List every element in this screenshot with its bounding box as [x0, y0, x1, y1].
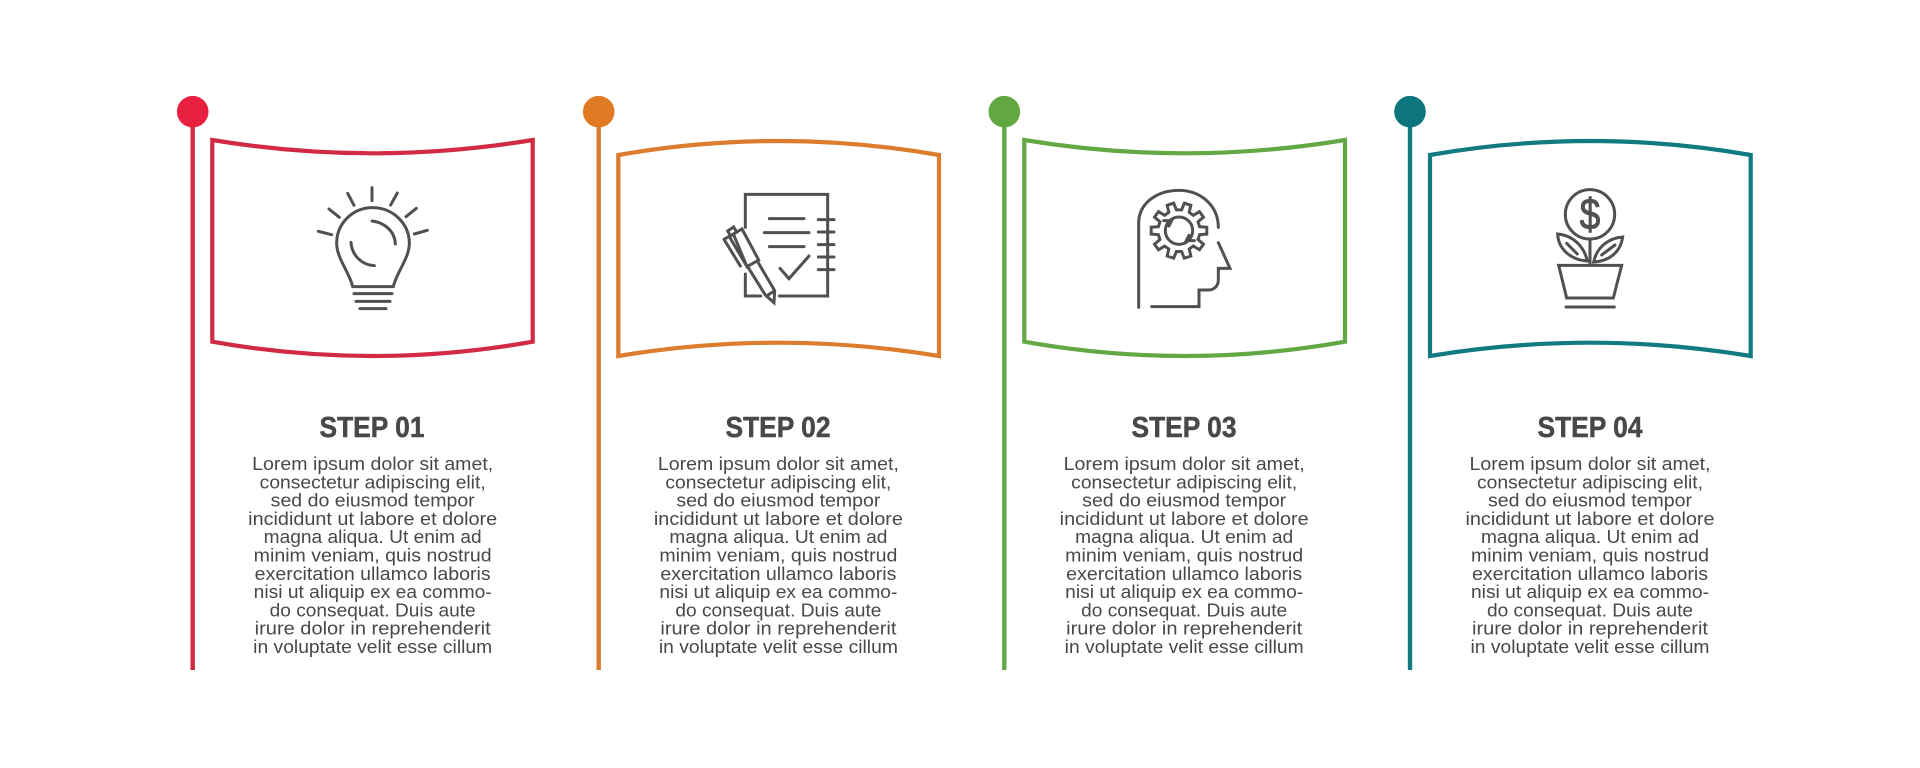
- flag pole: step 03: [1002, 112, 1006, 670]
- body text: step 03: incididunt ut labore et dolore: [1060, 509, 1309, 529]
- body text: step 02: exercitation ullamco laboris: [660, 564, 896, 584]
- body text: step 02: nisi ut aliquip ex ea commo-: [659, 582, 897, 602]
- body text: step 04: minim veniam, quis nostrud: [1471, 546, 1709, 566]
- heading: step 03: STEP 03: [1132, 412, 1236, 444]
- body text: step 04: sed do eiusmod tempor: [1488, 491, 1692, 511]
- body text: step 01: Lorem ipsum dolor sit amet,: [252, 454, 493, 474]
- flag pole: step 04: [1408, 112, 1412, 670]
- heading: step 02: STEP 02: [726, 412, 830, 444]
- body text: step 03: minim veniam, quis nostrud: [1065, 546, 1303, 566]
- pole ball: step 01: [177, 96, 208, 127]
- flag pole: step 02: [597, 112, 601, 670]
- body text: step 02: sed do eiusmod tempor: [676, 491, 880, 511]
- body text: step 02: incididunt ut labore et dolore: [654, 509, 903, 529]
- body text: step 03: exercitation ullamco laboris: [1066, 564, 1302, 584]
- panel: step 02: [583, 96, 939, 670]
- body text: step 03: irure dolor in reprehenderit: [1066, 619, 1302, 639]
- body text: step 02: in voluptate velit esse cillum: [659, 637, 898, 657]
- body text: step 02: consectetur adipiscing elit,: [665, 472, 891, 492]
- body text: step 03: [1060, 454, 1309, 657]
- body text: step 01: do consequat. Duis aute: [270, 600, 476, 620]
- body text: step 04: incididunt ut labore et dolore: [1466, 509, 1714, 529]
- icon: light bulb: [318, 188, 427, 309]
- body text: step 04: consectetur adipiscing elit,: [1477, 472, 1703, 492]
- body text: step 01: magna aliqua. Ut enim ad: [264, 527, 482, 547]
- body text: step 02: do consequat. Duis aute: [675, 600, 881, 620]
- pole ball: step 02: [583, 96, 614, 127]
- body text: step 02: Lorem ipsum dolor sit amet,: [658, 454, 899, 474]
- body text: step 02: magna aliqua. Ut enim ad: [669, 527, 887, 547]
- body text: step 04: Lorem ipsum dolor sit amet,: [1470, 454, 1710, 474]
- icon: money plant: $: [1580, 190, 1600, 239]
- panel: step 01: [177, 96, 533, 670]
- body text: step 02: [654, 454, 903, 657]
- flag outline: step 03: [1024, 140, 1345, 356]
- body text: step 03: nisi ut aliquip ex ea commo-: [1065, 582, 1303, 602]
- flag outline: step 02: [618, 141, 939, 356]
- panel: step 04: [1394, 96, 1751, 670]
- heading: step 04: STEP 04: [1538, 412, 1642, 444]
- body text: step 03: consectetur adipiscing elit,: [1071, 472, 1297, 492]
- pole ball: step 04: [1394, 96, 1426, 127]
- body text: step 04: exercitation ullamco laboris: [1472, 564, 1708, 584]
- pole ball: step 03: [988, 96, 1020, 127]
- body text: step 02: irure dolor in reprehenderit: [660, 619, 896, 639]
- icon: money plant: [1558, 190, 1623, 307]
- body text: step 01: sed do eiusmod tempor: [271, 491, 475, 511]
- body text: step 04: irure dolor in reprehenderit: [1472, 619, 1708, 639]
- body text: step 01: irure dolor in reprehenderit: [255, 619, 491, 639]
- flag outline: step 04: [1430, 141, 1751, 356]
- body text: step 01: consectetur adipiscing elit,: [260, 472, 486, 492]
- body text: step 02: minim veniam, quis nostrud: [659, 546, 897, 566]
- body text: step 04: magna aliqua. Ut enim ad: [1481, 527, 1699, 547]
- body text: step 01: exercitation ullamco laboris: [255, 564, 491, 584]
- body text: step 04: nisi ut aliquip ex ea commo-: [1471, 582, 1709, 602]
- body text: step 01: [248, 454, 497, 657]
- icon: head with gear: [1139, 190, 1230, 307]
- body text: step 04: in voluptate velit esse cillum: [1470, 637, 1710, 657]
- body text: step 03: Lorem ipsum dolor sit amet,: [1064, 454, 1305, 474]
- body text: step 03: in voluptate velit esse cillum: [1065, 637, 1304, 657]
- heading: step 01: STEP 01: [320, 412, 424, 444]
- body text: step 01: minim veniam, quis nostrud: [254, 546, 492, 566]
- panel: step 03: [988, 96, 1345, 670]
- body text: step 03: sed do eiusmod tempor: [1082, 491, 1286, 511]
- icon: notebook and pen: [724, 194, 834, 303]
- flag pole: step 01: [190, 112, 195, 670]
- body text: step 01: in voluptate velit esse cillum: [253, 637, 492, 657]
- body text: step 03: magna aliqua. Ut enim ad: [1075, 527, 1293, 547]
- body text: step 03: do consequat. Duis aute: [1081, 600, 1287, 620]
- body text: step 04: do consequat. Duis aute: [1487, 600, 1693, 620]
- body text: step 01: incididunt ut labore et dolore: [248, 509, 497, 529]
- flag outline: step 01: [212, 140, 533, 356]
- body text: step 04: [1466, 454, 1714, 657]
- body text: step 01: nisi ut aliquip ex ea commo-: [254, 582, 492, 602]
